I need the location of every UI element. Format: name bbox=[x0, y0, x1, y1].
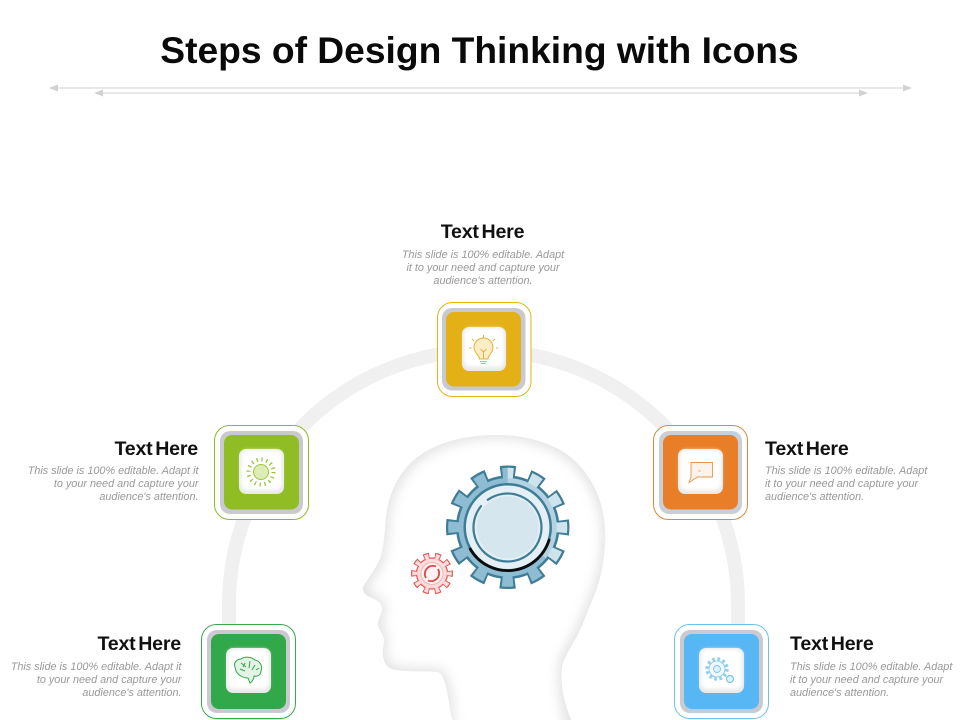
tile bbox=[438, 302, 531, 396]
description: it to your need and capture your bbox=[765, 478, 919, 490]
description: audience's attention. bbox=[765, 491, 864, 503]
tile bbox=[214, 426, 308, 520]
icon: cog pair bbox=[707, 659, 734, 682]
step: top, yellow bbox=[402, 221, 565, 396]
icon: small red gear bbox=[414, 556, 450, 592]
head silhouette bbox=[363, 435, 605, 720]
description: audience's attention. bbox=[790, 687, 889, 699]
heading: Text Here bbox=[97, 633, 181, 655]
tile bbox=[654, 426, 748, 520]
double-headed arrow: upper bbox=[49, 84, 912, 92]
title: Steps of Design Thinking with Icons bbox=[160, 29, 799, 71]
tile bbox=[202, 624, 296, 718]
description: it to your need and capture your bbox=[790, 674, 944, 686]
description: it to your need and capture your bbox=[406, 262, 560, 274]
icon: large blue gear bbox=[452, 472, 563, 583]
heading: Text Here bbox=[765, 438, 849, 460]
description: audience's attention. bbox=[99, 491, 198, 503]
description: This slide is 100% editable. Adapt it bbox=[28, 465, 199, 477]
heading: Text Here bbox=[441, 221, 525, 243]
description: to your need and capture your bbox=[37, 674, 182, 686]
description: to your need and capture your bbox=[54, 478, 199, 490]
icon: light bulb bbox=[469, 335, 498, 364]
description: This slide is 100% editable. Adapt bbox=[765, 465, 928, 477]
step: right, orange bbox=[654, 426, 928, 520]
tile bbox=[674, 624, 768, 718]
description: audience's attention. bbox=[82, 687, 182, 699]
description: audience's attention. bbox=[433, 275, 533, 287]
step: left, lime green bbox=[28, 426, 308, 520]
icon: sun bbox=[248, 460, 274, 484]
heading: Text Here bbox=[114, 438, 198, 460]
double-headed arrow: lower bbox=[94, 90, 868, 96]
heading: Text Here bbox=[790, 633, 874, 655]
step: lower left, green bbox=[11, 624, 296, 718]
step: lower right, blue bbox=[674, 624, 953, 718]
icon: speech bubble bbox=[689, 462, 712, 482]
arc connecting the steps bbox=[229, 351, 738, 640]
description: This slide is 100% editable. Adapt bbox=[402, 249, 565, 261]
description: This slide is 100% editable. Adapt bbox=[790, 661, 953, 673]
description: This slide is 100% editable. Adapt it bbox=[11, 661, 182, 673]
icon: brain bbox=[235, 657, 262, 683]
